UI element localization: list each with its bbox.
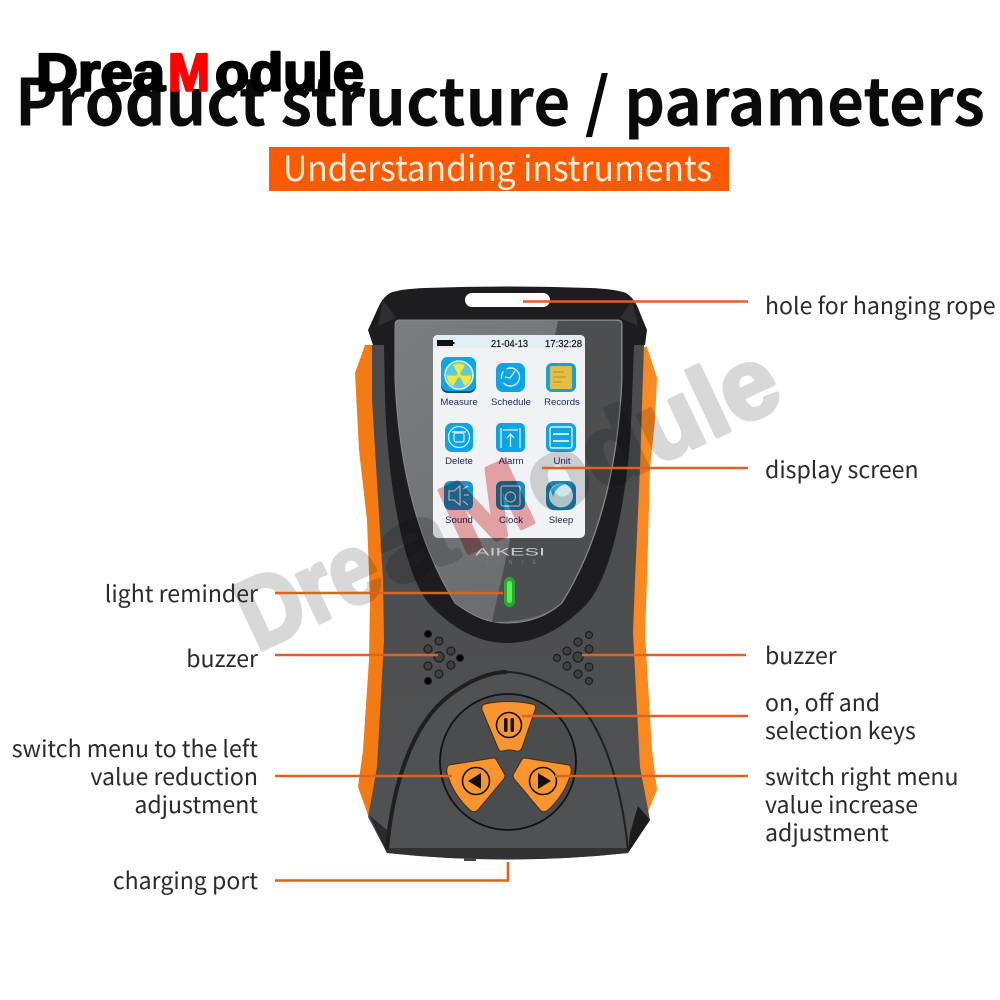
control circle <box>440 694 576 830</box>
right buzzer holes <box>554 632 593 684</box>
icon: clock <box>496 481 525 510</box>
watermark <box>219 322 796 672</box>
icon: alarm <box>496 423 525 452</box>
cap facet highlights <box>378 300 638 326</box>
charging port <box>464 858 476 861</box>
callout: selection keys: selection keys <box>765 712 916 746</box>
callout: charging port <box>113 862 508 896</box>
orange side grips <box>355 345 657 815</box>
icon labels: Alarm <box>498 456 524 467</box>
icon labels: Clock <box>499 515 523 526</box>
callout: right menu: adjustment <box>765 814 889 848</box>
icon: delete <box>445 423 473 452</box>
button: left <box>447 758 505 812</box>
icon labels: Delete <box>445 456 473 467</box>
bottom edge shading <box>387 841 628 860</box>
icon labels: Sleep <box>549 515 573 526</box>
brand mark on device: AIKESI <box>475 546 545 558</box>
callout: light reminder: light reminder <box>105 575 258 609</box>
title: Product structure / parameters <box>15 50 985 144</box>
brand tagline on device: L I N / E <box>486 560 537 566</box>
callout: charging port: charging port <box>113 862 258 896</box>
brand logo: M <box>168 44 210 102</box>
glass panel <box>395 320 622 623</box>
watermark: Dre <box>219 509 398 672</box>
callout: right menu <box>555 758 959 848</box>
right bottom corner facet <box>628 806 650 853</box>
button: power / pause <box>482 702 536 751</box>
brand logo: odule <box>215 44 364 102</box>
callout: hanging hole: hole for hanging rope <box>765 287 996 321</box>
callout: display screen: display screen <box>765 451 919 485</box>
icon: sleep <box>546 481 576 510</box>
icon: records <box>546 363 576 392</box>
lower control arch <box>387 672 628 850</box>
display screen <box>433 335 585 538</box>
device illustration <box>355 286 657 861</box>
callout: left menu: switch menu to the left <box>12 730 258 764</box>
callout: right buzzer: buzzer <box>765 637 837 671</box>
icon: schedule <box>496 363 525 392</box>
icon labels: Sound <box>445 515 473 526</box>
brand logo <box>36 44 364 102</box>
callout: selection keys: on, off and <box>765 684 880 718</box>
icon labels: Records <box>544 397 580 408</box>
status bar: 21-04-13 <box>491 338 528 350</box>
brand logo: Drea <box>36 44 166 102</box>
callout: right menu: value increase <box>765 786 918 820</box>
status bar: 17:32:28 <box>545 338 582 350</box>
black top cap and arch <box>368 286 647 643</box>
button: right <box>513 758 571 812</box>
icon: unit <box>546 423 576 452</box>
left bottom corner facet <box>369 815 387 853</box>
watermark: a <box>355 475 471 608</box>
callout: left menu <box>12 730 452 820</box>
icon labels: Unit <box>553 456 571 467</box>
callout: right menu: switch right menu <box>765 758 959 792</box>
callout: left menu: value reduction <box>90 758 258 792</box>
icon labels: Schedule <box>491 397 531 408</box>
icon: sound <box>444 481 473 510</box>
icon: measure <box>441 357 476 393</box>
glass reflection <box>492 321 621 622</box>
callout: left buzzer: buzzer <box>186 640 258 674</box>
left buzzer holes <box>424 630 464 684</box>
subtitle banner: Understanding instruments <box>283 141 712 192</box>
device body <box>368 345 650 860</box>
watermark: odule <box>505 322 796 538</box>
hanging hole <box>465 293 550 307</box>
callout: selection keys <box>522 684 916 746</box>
icon labels: Measure <box>440 397 478 408</box>
green light indicator <box>504 577 515 607</box>
watermark: M <box>424 438 549 576</box>
callout: left menu: adjustment <box>134 786 258 820</box>
status bar <box>437 338 582 350</box>
icon labels <box>440 397 580 526</box>
